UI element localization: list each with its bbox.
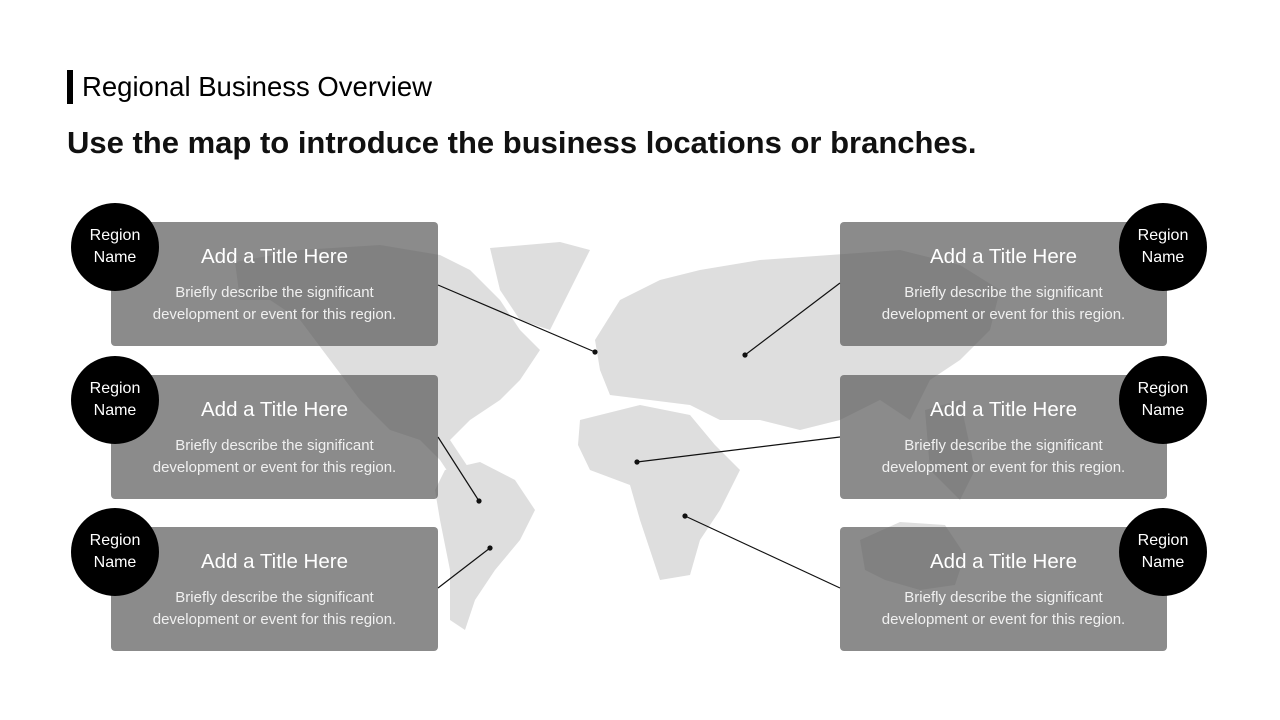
badge: left 3: Region: [90, 532, 140, 549]
badge: left 3: Name: [94, 554, 136, 571]
panel: right 1: Add a Title Here: [930, 245, 1077, 268]
panel: right 1: [840, 222, 1167, 346]
panel: right 3: development or event for this region.: [882, 611, 1125, 628]
badge: left 2: [71, 356, 159, 444]
panel: right 2: development or event for this region.: [882, 459, 1125, 476]
panel: left 1: Briefly describe the significant: [175, 284, 374, 301]
panel: right 1: Briefly describe the significant: [904, 284, 1103, 301]
panel: left 3: Add a Title Here: [201, 550, 348, 573]
title: Regional Business Overview: [82, 71, 432, 102]
badge: right 3: [1119, 508, 1207, 596]
badge: right 2: Region: [1138, 380, 1188, 397]
badge: left 2: Name: [94, 402, 136, 419]
panel: left 2: development or event for this region.: [153, 459, 396, 476]
connector lines: [438, 283, 840, 588]
panel: left 2: Briefly describe the significant: [175, 437, 374, 454]
panel: left 1: development or event for this region.: [153, 306, 396, 323]
panel: right 2: Add a Title Here: [930, 398, 1077, 421]
badge: left 1: [71, 203, 159, 291]
panel: right 1: development or event for this region.: [882, 306, 1125, 323]
panel: left 1: Add a Title Here: [201, 245, 348, 268]
badge: right 1: Region: [1138, 227, 1188, 244]
panel: left 2: [111, 375, 438, 499]
panel: right 3: Briefly describe the significant: [904, 589, 1103, 606]
badge: left 3: [71, 508, 159, 596]
badge: left 1: Name: [94, 249, 136, 266]
badge: right 1: [1119, 203, 1207, 291]
panel: left 2: Add a Title Here: [201, 398, 348, 421]
panel: left 3: [111, 527, 438, 651]
panel: left 3: Briefly describe the significant: [175, 589, 374, 606]
badge: right 2: Name: [1142, 402, 1184, 419]
panel: right 3: [840, 527, 1167, 651]
title accent bar: [67, 70, 73, 104]
panel: right 2: [840, 375, 1167, 499]
badge: left 2: Region: [90, 380, 140, 397]
badge: right 3: Region: [1138, 532, 1188, 549]
subtitle: Use the map to introduce the business locations or branches.: [67, 125, 977, 160]
badge: left 1: Region: [90, 227, 140, 244]
panel: right 3: Add a Title Here: [930, 550, 1077, 573]
badge: right 1: Name: [1142, 249, 1184, 266]
panel: right 2: Briefly describe the significant: [904, 437, 1103, 454]
panel: left 3: development or event for this region.: [153, 611, 396, 628]
badge: right 3: Name: [1142, 554, 1184, 571]
panel: left 1: [111, 222, 438, 346]
badge: right 2: [1119, 356, 1207, 444]
